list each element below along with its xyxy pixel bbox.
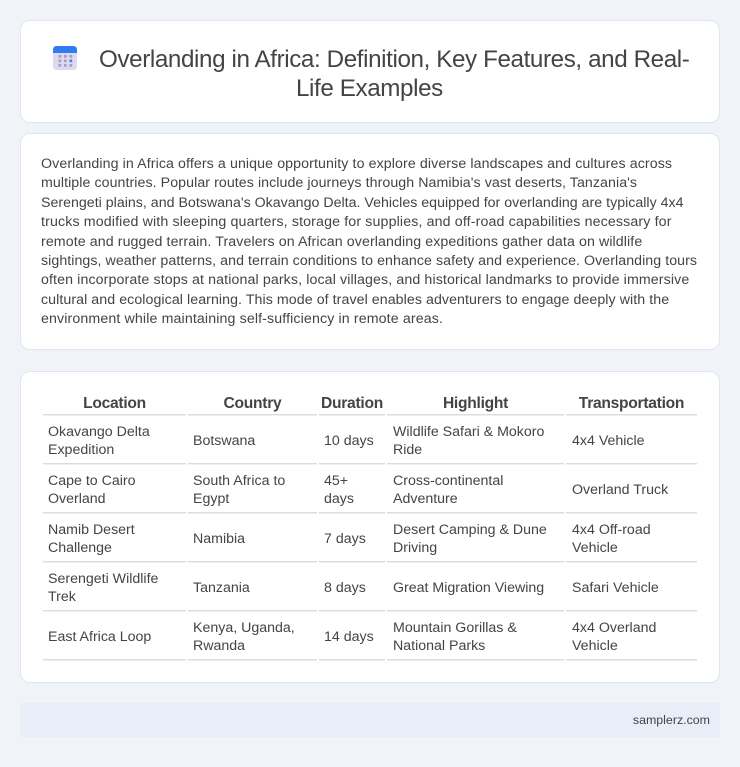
title [99, 46, 689, 102]
table row: Okavango Delta Expedition: Wildlife Safari & Mokoro [393, 424, 544, 440]
table row: Serengeti Wildlife Trek: 8 days [324, 580, 366, 596]
table row: Cape to Cairo Overland: Overland [48, 491, 106, 507]
table row: East Africa Loop: 14 days [324, 629, 374, 645]
text block: introduction [41, 156, 697, 327]
panel: header [20, 20, 720, 123]
table header: Location [83, 395, 146, 412]
table row: Serengeti Wildlife Trek: Great Migration Viewing [393, 580, 544, 596]
table row: Cape to Cairo Overland: Overland Truck [572, 482, 668, 498]
table row: Cape to Cairo Overland: Adventure [393, 491, 458, 507]
table row: East Africa Loop: Rwanda [193, 638, 245, 654]
table row: Okavango Delta Expedition [48, 424, 645, 458]
text block: introduction: remote and rugged terrain. Travelers on African overlanding expeditions gather data on wildlife [41, 234, 642, 250]
table row: Cape to Cairo Overland: days [324, 491, 354, 507]
table row: Cape to Cairo Overland [48, 473, 668, 507]
icon: calendar [53, 46, 77, 70]
table row: Cape to Cairo Overland: Egypt [193, 491, 229, 507]
table row: Okavango Delta Expedition: Okavango Delta [48, 424, 150, 440]
table row: Serengeti Wildlife Trek: Serengeti Wildlife [48, 571, 158, 587]
table row: East Africa Loop [48, 620, 656, 654]
table row: Namib Desert Challenge: Driving [393, 540, 437, 556]
footer [20, 703, 720, 737]
table header: Highlight [443, 395, 508, 412]
table header: Country [224, 395, 281, 412]
title: Overlanding in Africa: Definition, Key Features, and Real- [99, 46, 689, 73]
table row: East Africa Loop: Vehicle [572, 638, 618, 654]
table row: Namib Desert Challenge: Challenge [48, 540, 112, 556]
panel: table [20, 371, 720, 683]
table row: Okavango Delta Expedition: 4x4 Vehicle [572, 433, 645, 449]
table row: Okavango Delta Expedition: Ride [393, 442, 422, 458]
panel: introduction [20, 133, 720, 350]
table row: East Africa Loop: Mountain Gorillas & [393, 620, 517, 636]
table row: East Africa Loop: Kenya, Uganda, [193, 620, 295, 636]
text block: introduction: cultural and ecological learning. This mode of travel enables adventurers to engage deeply with the [41, 292, 669, 308]
table row: Okavango Delta Expedition: 10 days [324, 433, 374, 449]
table row: Cape to Cairo Overland: Cross-continental [393, 473, 503, 489]
table row: Namib Desert Challenge: Namibia [193, 531, 245, 547]
table row: Namib Desert Challenge: 4x4 Off-road [572, 522, 651, 538]
table row: Namib Desert Challenge: Namib Desert [48, 522, 135, 538]
text block: introduction: sightings, weather patterns, and terrain conditions to enhance safety and experience. Overlanding tours [41, 253, 697, 269]
text block: introduction: multiple countries. Popular routes include journeys through Namibia's vast deserts, Tanzania's [41, 175, 637, 191]
text block: introduction: environment while maintaining self-sufficiency in remote areas. [41, 311, 443, 327]
table row: Cape to Cairo Overland: South Africa to [193, 473, 285, 489]
text block: introduction: trucks modified with sleeping quarters, storage for supplies, and off-road capabilities necessary for [41, 214, 672, 230]
table row: Serengeti Wildlife Trek: Safari Vehicle [572, 580, 659, 596]
table row: East Africa Loop: National Parks [393, 638, 485, 654]
text block: introduction: Serengeti plains, and Botswana's Okavango Delta. Vehicles equipped for overlanding are typically 4x4 [41, 195, 684, 211]
table row: Serengeti Wildlife Trek: Trek [48, 589, 76, 605]
table header: Transportation [579, 395, 684, 412]
table row: Namib Desert Challenge [48, 522, 651, 556]
table row: East Africa Loop: 4x4 Overland [572, 620, 656, 636]
table row: Okavango Delta Expedition: Expedition [48, 442, 114, 458]
table row: Namib Desert Challenge: Vehicle [572, 540, 618, 556]
title: Life Examples [296, 75, 443, 102]
table header [83, 395, 684, 412]
text block: introduction: Overlanding in Africa offers a unique opportunity to explore diverse landscapes and cultures across [41, 156, 672, 172]
table row: Serengeti Wildlife Trek [48, 571, 659, 605]
text block: introduction: often incorporate stops at national parks, local villages, and historical landmarks to provide immersive [41, 272, 689, 288]
footer text: samplerz.com [633, 713, 710, 727]
table row: Cape to Cairo Overland: Cape to Cairo [48, 473, 136, 489]
table row: Namib Desert Challenge: Desert Camping & Dune [393, 522, 547, 538]
table row: Namib Desert Challenge: 7 days [324, 531, 366, 547]
table row: Okavango Delta Expedition: Botswana [193, 433, 255, 449]
table row: East Africa Loop: East Africa Loop [48, 629, 151, 645]
table header: Duration [321, 395, 383, 412]
table row: Cape to Cairo Overland: 45+ [324, 473, 348, 489]
table row: Serengeti Wildlife Trek: Tanzania [193, 580, 250, 596]
